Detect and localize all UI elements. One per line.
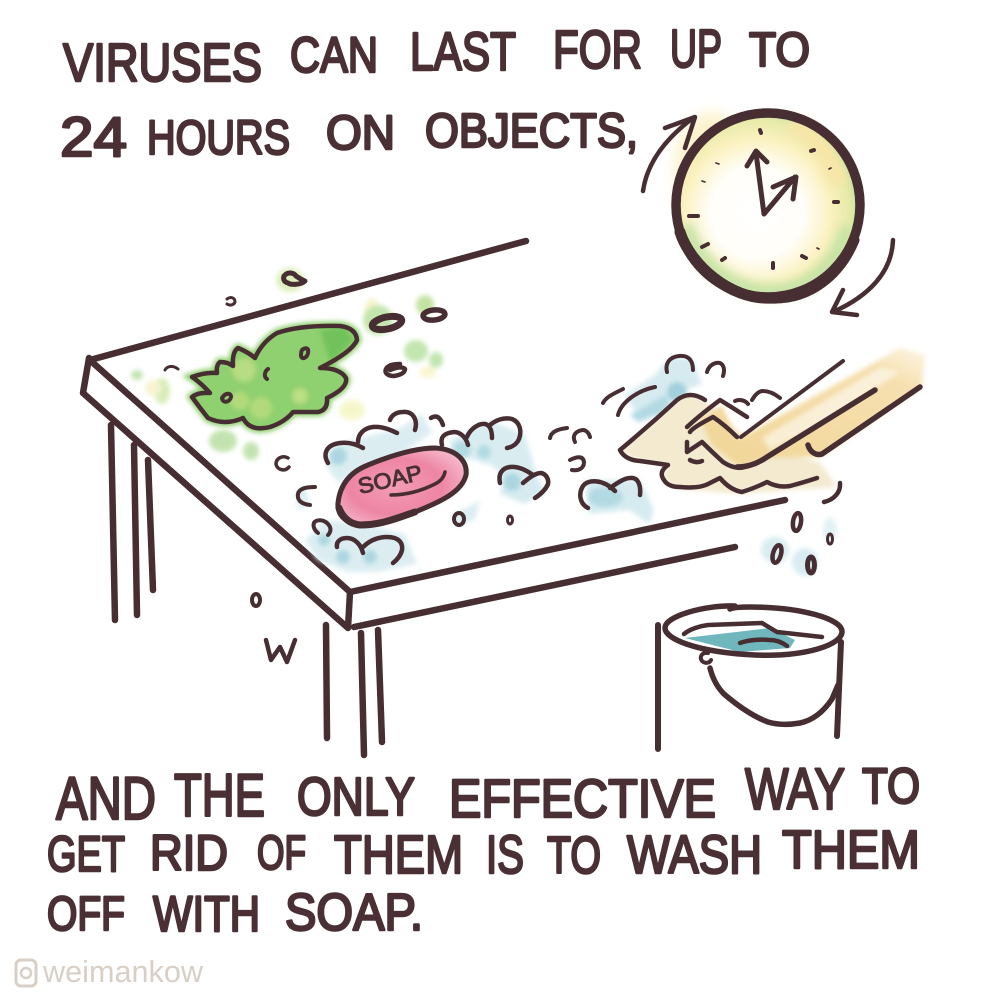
icon: clock with arrows <box>643 112 893 315</box>
virus patch: green germs <box>131 268 445 470</box>
water drops <box>252 513 837 662</box>
text: bottom caption: WAY <box>745 757 845 822</box>
heading: top text: UP <box>670 19 722 79</box>
heading: top text: HOURS <box>147 112 290 165</box>
text: bottom caption: WASH <box>627 825 762 885</box>
heading: top text: CAN <box>290 27 378 83</box>
text: bottom caption: OFF <box>47 888 125 941</box>
icon: soap bar with suds <box>295 412 654 572</box>
icon: hand wiping with cloth <box>603 348 925 502</box>
heading: top text: 24 <box>60 105 127 168</box>
icon: soap bar with suds: SOAP <box>356 460 424 499</box>
icon: bucket <box>658 606 842 749</box>
panel: table <box>83 241 785 755</box>
text: bottom caption: RID <box>150 825 228 881</box>
text: bottom caption: ONLY <box>297 767 415 827</box>
text: bottom caption: TO <box>862 758 920 814</box>
text: bottom caption: GET <box>47 826 125 882</box>
text: bottom caption: EFFECTIVE <box>449 769 716 829</box>
heading: top text: VIRUSES <box>63 33 262 93</box>
text: bottom caption: THEM <box>334 825 463 885</box>
text: bottom caption: THEM <box>782 820 920 880</box>
heading: top text: OBJECTS, <box>425 105 638 158</box>
text: bottom caption <box>47 757 920 942</box>
heading: top text: FOR <box>553 20 642 80</box>
text: bottom caption: THE <box>174 762 265 829</box>
heading: top text <box>60 19 810 168</box>
text: bottom caption: WITH <box>153 886 260 942</box>
text: bottom caption: OF <box>257 827 306 880</box>
credit: weimankow: weimankow <box>42 954 204 989</box>
heading: top text: ON <box>326 107 395 160</box>
text: bottom caption: SOAP. <box>285 884 423 942</box>
text: bottom caption: TO <box>547 827 601 885</box>
heading: top text: TO <box>749 24 810 77</box>
heading: top text: LAST <box>410 22 516 82</box>
text: bottom caption: IS <box>486 825 524 885</box>
text: bottom caption: AND <box>56 765 156 832</box>
